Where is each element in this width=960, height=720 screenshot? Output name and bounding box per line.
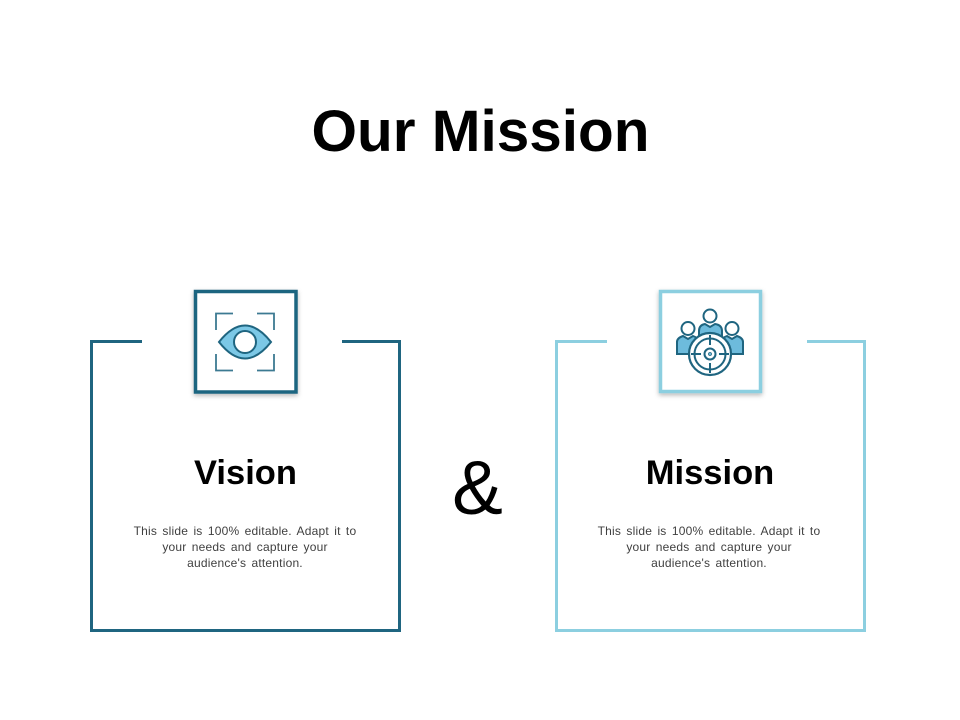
vision frame [92,342,400,630]
mission body text [598,524,820,570]
icon: team with target [660,292,760,392]
vision body text [134,524,356,570]
panel: vision [92,292,400,630]
mission heading: Mission [646,454,774,492]
title: Our Mission [311,99,650,164]
ampersand: & [452,446,503,531]
icon: eye in focus square [196,292,296,392]
mission frame [556,342,864,630]
panel: mission [556,292,864,630]
vision body text: your needs and capture your [162,540,328,554]
mission body text: This slide is 100% editable. Adapt it to [598,524,820,538]
vision body text: This slide is 100% editable. Adapt it to [134,524,356,538]
mission body text: audience's attention. [651,556,767,570]
mission body text: your needs and capture your [626,540,792,554]
vision body text: audience's attention. [187,556,303,570]
vision heading: Vision [194,454,297,492]
